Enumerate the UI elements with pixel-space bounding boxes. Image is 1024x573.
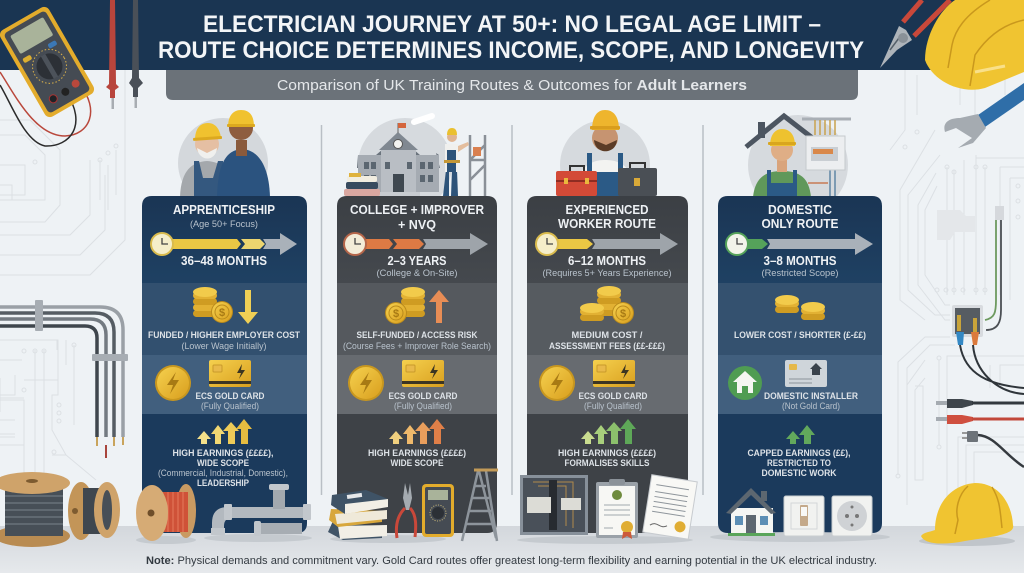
- icon: certificate clipboard: [596, 479, 638, 539]
- panel: qualification: [527, 355, 688, 414]
- icon: black plug lead: [936, 399, 1024, 408]
- panel: cost: (Lower Wage Initially): [182, 341, 266, 351]
- panel: earnings: FORMALISES SKILLS: [564, 458, 650, 469]
- icon: book stack: [328, 490, 446, 543]
- icon: down arrow: [238, 290, 258, 324]
- icon: hard hat bottom right: [919, 483, 1015, 546]
- panel: qualification: ECS GOLD CARD: [578, 391, 648, 402]
- icon: grey pipes: [204, 484, 312, 542]
- card: Experienced Worker Route: [527, 110, 688, 533]
- heading: WORKER ROUTE: [558, 217, 656, 231]
- worker on scaffold: [443, 128, 485, 196]
- icon: pliers: [396, 483, 416, 538]
- panel: qualification: [337, 355, 497, 414]
- icon: coins: [385, 287, 425, 324]
- icon: stepladder: [462, 470, 498, 541]
- panel: duration: 6–12 MONTHS: [568, 254, 646, 268]
- panel: duration: (Restricted Scope): [762, 268, 838, 278]
- illustration: domestic installer: [746, 115, 851, 215]
- heading: COLLEGE + IMPROVER: [350, 203, 484, 217]
- heading: [558, 203, 656, 231]
- icon: rising arrows: [581, 419, 636, 444]
- icon: rising arrows: [786, 425, 815, 444]
- panel: duration: [337, 196, 497, 283]
- panel: cost: SELF-FUNDED / ACCESS RISK: [356, 330, 478, 341]
- icon: rising arrows: [197, 419, 252, 444]
- panel: cost: (Course Fees + Improver Role Search): [343, 341, 491, 351]
- panel: duration: [718, 196, 882, 283]
- icon: red plug lead: [936, 415, 1024, 424]
- panel: earnings: DOMESTIC WORK: [762, 468, 837, 479]
- icon: junction box and cables: [952, 206, 1024, 394]
- circuit background left: [0, 70, 125, 480]
- icon: red cable reel: [136, 484, 196, 544]
- panel: cost: [337, 283, 497, 355]
- column dividers: [322, 125, 703, 495]
- icon: conduit pipes: [0, 300, 128, 458]
- card: College + Improver + NVQ: [337, 116, 497, 533]
- panel: duration: 3–8 MONTHS: [764, 254, 836, 268]
- panel: earnings: HIGH EARNINGS (££££),: [172, 448, 274, 459]
- panel: earnings: WIDE SCOPE: [390, 458, 444, 469]
- panel: duration: [527, 196, 688, 283]
- panel: duration: [142, 196, 307, 283]
- panel: cost: [142, 283, 307, 355]
- icon: wall socket: [832, 496, 872, 536]
- panel: earnings: LEADERSHIP: [197, 478, 250, 489]
- card: Apprenticeship: [142, 110, 307, 533]
- icon: green home badge: [728, 366, 762, 400]
- header band: [0, 0, 1024, 70]
- panel: cost: [718, 283, 882, 355]
- icon: cable reels left: [0, 472, 120, 547]
- icon: pliers: [880, 0, 950, 68]
- icon: coins: [580, 286, 634, 324]
- panel: earnings: CAPPED EARNINGS (££),: [748, 448, 850, 459]
- icon: two-pin plug lead: [962, 431, 1024, 467]
- subtitle: Comparison of UK Training Routes & Outcomes for Adult Learners: [277, 77, 747, 94]
- illustration: two workers: [178, 110, 270, 208]
- panel: duration: (Requires 5+ Years Experience): [542, 268, 672, 278]
- panel: earnings: RESTRICTED TO: [767, 458, 831, 469]
- title: ROUTE CHOICE DETERMINES INCOME, SCOPE, AND LONGEVITY: [158, 37, 864, 64]
- icon: signed document: [643, 475, 697, 539]
- panel: duration: (College & On-Site): [376, 268, 458, 278]
- icon: hard hat top right: [925, 0, 1024, 90]
- heading: EXPERIENCED: [566, 203, 648, 217]
- timeline arrow: [151, 233, 297, 255]
- panel: earnings: [527, 414, 688, 533]
- panel: qualification: (Not Gold Card): [782, 401, 840, 411]
- card: Domestic Only Route: [718, 115, 882, 533]
- panel: qualification: ECS GOLD CARD: [388, 391, 458, 402]
- panel: qualification: [718, 355, 882, 414]
- heading: [762, 203, 838, 231]
- icon: briefcase: [618, 163, 657, 196]
- panel: cost: [527, 283, 688, 355]
- icon: test probes: [106, 0, 143, 109]
- timeline arrow: [536, 233, 678, 255]
- panel: earnings: HIGH EARNINGS (££££): [368, 448, 466, 459]
- heading: ONLY ROUTE: [762, 217, 838, 231]
- timeline arrow: [726, 233, 873, 255]
- circuit background right: [890, 70, 1024, 520]
- panel: cost: ASSESSMENT FEES (££-£££): [549, 341, 665, 352]
- panel: cost: FUNDED / HIGHER EMPLOYER COST: [148, 330, 300, 341]
- icon: coins: [193, 287, 233, 323]
- icon: up arrow: [429, 290, 449, 323]
- title: [158, 11, 864, 64]
- note: Note: Physical demands and commitment vary. Gold Card routes offer greatest long-term flexibility and earning potential in the UK electrical industry.: [146, 555, 877, 567]
- icon: light switch: [784, 496, 824, 536]
- icon: small multimeter: [422, 484, 454, 537]
- panel: cost: LOWER COST / SHORTER (£-££): [734, 330, 866, 341]
- illustration: college and worker: [344, 116, 485, 212]
- panel: earnings: (Commercial, Industrial, Domestic),: [158, 468, 288, 478]
- icon: coins: [775, 295, 825, 320]
- timeline arrow: [344, 233, 488, 255]
- panel: earnings: HIGH EARNINGS (££££): [558, 448, 656, 459]
- panel: earnings: [718, 414, 882, 533]
- panel: qualification: [142, 355, 307, 414]
- panel: qualification: DOMESTIC INSTALLER: [764, 391, 858, 402]
- heading: DOMESTIC: [768, 203, 832, 217]
- heading: APPRENTICESHIP: [173, 203, 275, 217]
- subtitle bar: [166, 70, 858, 100]
- panel: qualification: (Fully Qualified): [394, 401, 452, 411]
- panel: cost: MEDIUM COST /: [572, 330, 643, 341]
- icon: wrench: [944, 83, 1024, 148]
- icon: multimeter: [0, 5, 96, 146]
- heading: [350, 203, 484, 232]
- heading: + NVQ: [398, 218, 436, 232]
- panel: duration: (Age 50+ Focus): [190, 219, 258, 229]
- panel: qualification: (Fully Qualified): [584, 401, 642, 411]
- icon: consumer unit panel: [517, 475, 693, 544]
- panel: earnings: [337, 414, 497, 533]
- panel: duration: 2–3 YEARS: [388, 254, 446, 268]
- title: ELECTRICIAN JOURNEY AT 50+: NO LEGAL AGE LIMIT –: [203, 11, 821, 38]
- panel: qualification: ECS GOLD CARD: [196, 391, 265, 402]
- panel: earnings: WIDE SCOPE: [197, 458, 249, 469]
- floor: [0, 526, 1024, 573]
- panel: duration: 36–48 MONTHS: [181, 254, 267, 268]
- panel: earnings: [142, 414, 307, 533]
- icon: rising arrows: [389, 419, 445, 444]
- icon: domestic installer card: [785, 360, 827, 387]
- icon: red toolbox: [556, 166, 597, 196]
- icon: house: [710, 488, 890, 542]
- panel: qualification: (Fully Qualified): [201, 401, 259, 411]
- illustration: worker with tool cases: [556, 110, 657, 210]
- icon: book stack: [344, 173, 380, 196]
